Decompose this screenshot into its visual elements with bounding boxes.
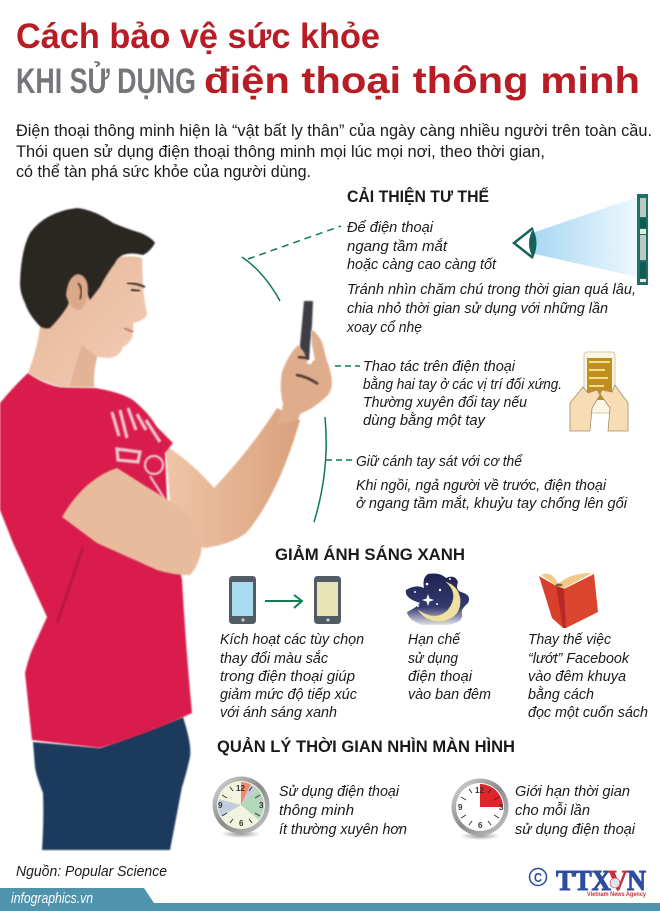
icon: clock with red quarter: 9 [458,803,463,812]
text: eye level: Để điện thoại [347,219,434,236]
text: read a book: Thay thế việc [528,631,611,648]
callout lines [242,226,360,522]
shirt print [112,408,164,498]
shirt crease [57,547,83,623]
icon: clock with red quarter: 3 [499,803,504,812]
source: Nguồn: Popular Science [16,863,167,880]
text: enable color options: giảm mức độ tiếp xúc [220,686,357,703]
icon: red book [539,573,598,628]
phone in hand [297,301,313,378]
text: limit at night: điện thoại [408,668,473,685]
title: điện thoại thông minh [204,60,640,101]
eyebrow and eye [127,283,145,291]
text: avoid staring [346,281,636,336]
text: eye level: ngang tầm mắt [347,238,448,255]
text: limit at night [408,631,491,703]
red t-shirt [0,373,192,748]
title: Cách bảo vệ sức khỏe [16,17,380,56]
text: read a book [528,631,648,721]
intro text: Thói quen sử dụng điện thoại thông minh mọi lúc mọi nơi, theo thời gian, [16,143,545,161]
icon: clock with red quarter: 12 [475,786,484,795]
text: use less often: thông minh [279,802,354,819]
heading: cải thiện tư thế: CẢI THIỆN TƯ THẾ [347,187,489,206]
hand [275,330,332,425]
fingers shadow [296,357,318,384]
icon: clock with coloured sectors: 12 [236,784,245,793]
neck shadow [70,345,97,387]
text: enable color options: với ánh sáng xanh [220,704,337,721]
text: limit at night: sử dụng [408,650,459,667]
logo: TTXVN [530,865,646,898]
icon: eye and phone [514,194,648,285]
text: two hands [363,358,562,429]
title [16,17,640,101]
lips [124,328,133,332]
jeans [33,717,190,850]
text: limit each use: sử dụng điện thoại [515,821,636,838]
logo: TTXVN: TTX [556,865,611,897]
footer bar [0,888,660,911]
gap between thumb and fingers [307,360,312,364]
person looking at phone [0,208,332,850]
logo: TTXVN: N [627,865,646,897]
text: avoid staring: chia nhỏ thời gian sử dụng với những lần [347,300,608,317]
text: enable color options: thay đổi màu sắc [220,650,328,667]
icon: clock with red quarter [452,778,508,840]
hair [20,208,155,328]
text: enable color options: trong điện thoại giúp [220,668,355,685]
logo: TTXVN: V [608,865,628,897]
text: keep arms close: ở ngang tầm mắt, khuỷu tay chống lên gối [356,495,628,512]
text: keep arms close: Khi ngồi, ngả người về trước, điện thoại [356,477,607,494]
intro text [16,122,652,181]
text: limit each use: Giới hạn thời gian [515,783,630,800]
text: eye level: hoặc càng cao càng tốt [347,256,497,273]
text: use less often: ít thường xuyên hơn [279,821,407,838]
text: read a book: đọc một cuốn sách [528,704,648,721]
text: use less often: Sử dụng điện thoại [279,783,400,800]
text: limit at night: Hạn chế [408,631,462,648]
text: two hands: bằng hai tay ở các vị trí đối xứng. [363,376,562,393]
crossed forearm [62,468,202,575]
icon: hands holding phone [570,352,628,431]
logo: TTXVN: C [534,870,543,885]
text: eye level [347,219,497,273]
title: KHI SỬ DỤNG [16,61,196,101]
ear [66,274,88,310]
text: keep arms close [356,453,628,512]
icon: moon and stars [406,574,469,625]
icon: phones with blue to warm screen [229,576,341,624]
text: enable color options: Kích hoạt các tùy chọn [220,631,364,648]
icon: clock with coloured sectors: 3 [259,801,264,810]
text: read a book: bằng cách [528,686,594,703]
text: read a book: “lướt” Facebook [528,650,630,667]
text: limit at night: vào ban đêm [408,686,491,703]
icon: clock with coloured sectors [212,776,270,838]
icon: clock with coloured sectors: 6 [239,819,244,828]
text: avoid staring: xoay cổ nhẹ [346,319,422,336]
text: limit each use: cho mỗi lần [515,802,590,819]
text: read a book: vào đêm khuya [528,668,626,685]
text: two hands: dùng bằng một tay [363,412,486,429]
intro text: có thể tàn phá sức khỏe của người dùng. [16,163,311,181]
icon: clock with coloured sectors: 9 [218,801,223,810]
text: enable color options [220,631,364,721]
text: limit each use [515,783,636,838]
text: keep arms close: Giữ cánh tay sát với cơ thể [356,453,523,470]
raised arm [165,408,300,548]
text: use less often [279,783,407,838]
logo: TTXVN: Vietnam News Agency [587,891,646,898]
icon: clock with red quarter: 6 [478,821,483,830]
text: two hands: Thường xuyên đổi tay nếu [363,394,528,411]
heading: giảm ánh sáng xanh: GIẢM ÁNH SÁNG XANH [275,545,465,564]
neck and face [28,256,147,388]
text: two hands: Thao tác trên điện thoại [363,358,516,375]
heading: quản lý thời gian nhìn màn hình: QUẢN LÝ THỜI GIAN NHÌN MÀN HÌNH [217,737,515,756]
intro text: Điện thoại thông minh hiện là “vật bất ly thân” của ngày càng nhiều người trên toàn cầu. [16,122,652,140]
footer bar: infographics.vn [11,890,93,907]
text: avoid staring: Tránh nhìn chăm chú trong thời gian quá lâu, [347,281,636,298]
